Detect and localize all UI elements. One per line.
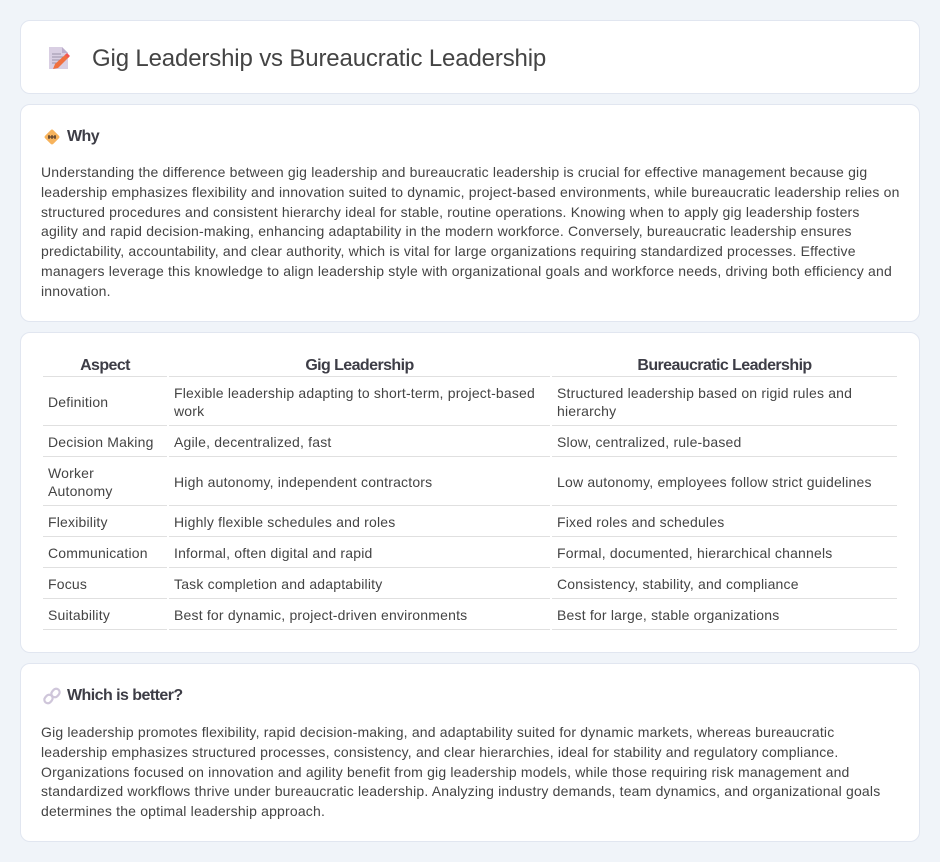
- comparison table: Aspect: [80, 356, 130, 374]
- comparison table: Focus: [48, 576, 87, 592]
- text block: why: agility and rapid decision-making, enhancing adaptability in the modern workforce. Conversely, bureaucratic leadership ensures: [41, 223, 852, 239]
- comparison table: Flexible leadership adapting to short-term, project-based: [174, 385, 535, 401]
- comparison table: Autonomy: [48, 483, 113, 499]
- title text: Gig Leadership vs Bureaucratic Leadership: [92, 45, 546, 72]
- text block: why: predictability, accountability, and clear authority, which is vital for large organizations requiring standardized processes. Effective: [41, 243, 856, 259]
- comparison table: Communication: [48, 545, 148, 561]
- comparison table: Informal, often digital and rapid: [174, 545, 372, 561]
- icon: warning diamond: [44, 130, 60, 144]
- panel: which is better: [20, 663, 920, 842]
- comparison table: Best for dynamic, project-driven environments: [174, 607, 467, 623]
- heading: why: Why: [67, 128, 99, 145]
- comparison table: Fixed roles and schedules: [557, 514, 724, 530]
- text block: which is better: standardized workflows thrive under bureaucratic leadership. Analyzing industry demands, team dynamics, and organizational goals: [41, 783, 880, 799]
- text block: why: Understanding the difference between gig leadership and bureaucratic leadership is crucial for effective management because gig: [41, 164, 867, 180]
- text block: why: innovation.: [41, 283, 111, 299]
- text block: which is better: leadership emphasizes structured processes, consistency, and clear hierarchies, ideal for stability and regulatory compliance.: [41, 744, 838, 760]
- text block: which is better: [41, 724, 880, 819]
- comparison table: work: [174, 403, 204, 419]
- comparison table: Low autonomy, employees follow strict guidelines: [557, 474, 872, 490]
- comparison table: Formal, documented, hierarchical channels: [557, 545, 832, 561]
- comparison table: Consistency, stability, and compliance: [557, 576, 799, 592]
- icon: chain link: [43, 688, 61, 704]
- text block: which is better: determines the optimal leadership approach.: [41, 803, 325, 819]
- panel: why: [20, 104, 920, 322]
- comparison table: hierarchy: [557, 403, 616, 419]
- comparison table: Slow, centralized, rule-based: [557, 434, 742, 450]
- comparison table: Flexibility: [48, 514, 108, 530]
- comparison table: Agile, decentralized, fast: [174, 434, 331, 450]
- panel: title: [20, 20, 920, 94]
- comparison table: Definition: [48, 394, 108, 410]
- heading: which is better: Which is better?: [67, 687, 183, 704]
- comparison table: Highly flexible schedules and roles: [174, 514, 395, 530]
- comparison table: Bureaucratic Leadership: [637, 356, 812, 374]
- comparison table: Structured leadership based on rigid rules and: [557, 385, 852, 401]
- text block: why: structured procedures and consistent hierarchy ideal for stable, routine operations. Knowing when to apply gig leadership fosters: [41, 204, 860, 220]
- panel: comparison table: [20, 332, 920, 653]
- comparison table: Suitability: [48, 607, 110, 623]
- comparison table: Decision Making: [48, 434, 154, 450]
- comparison table: Worker: [48, 465, 94, 481]
- text block: why: managers leverage this knowledge to align leadership style with organizational goals and workforce needs, driving both efficiency and: [41, 263, 892, 279]
- comparison table: Best for large, stable organizations: [557, 607, 779, 623]
- comparison table: [43, 356, 897, 630]
- text block: why: leadership emphasizes flexibility and innovation suited to dynamic, project-based environments, while bureaucratic leadership relies on: [41, 184, 900, 200]
- text block: which is better: Gig leadership promotes flexibility, rapid decision-making, and adaptability suited for dynamic markets, whereas bureaucratic: [41, 724, 834, 740]
- comparison table: Task completion and adaptability: [174, 576, 382, 592]
- comparison table: Gig Leadership: [305, 356, 414, 374]
- comparison table: High autonomy, independent contractors: [174, 474, 432, 490]
- text block: which is better: Organizations focused on innovation and agility benefit from gig leadership models, while those requiring risk management and: [41, 764, 850, 780]
- icon: memo with pencil: [49, 47, 70, 69]
- text block: why: [41, 164, 900, 299]
